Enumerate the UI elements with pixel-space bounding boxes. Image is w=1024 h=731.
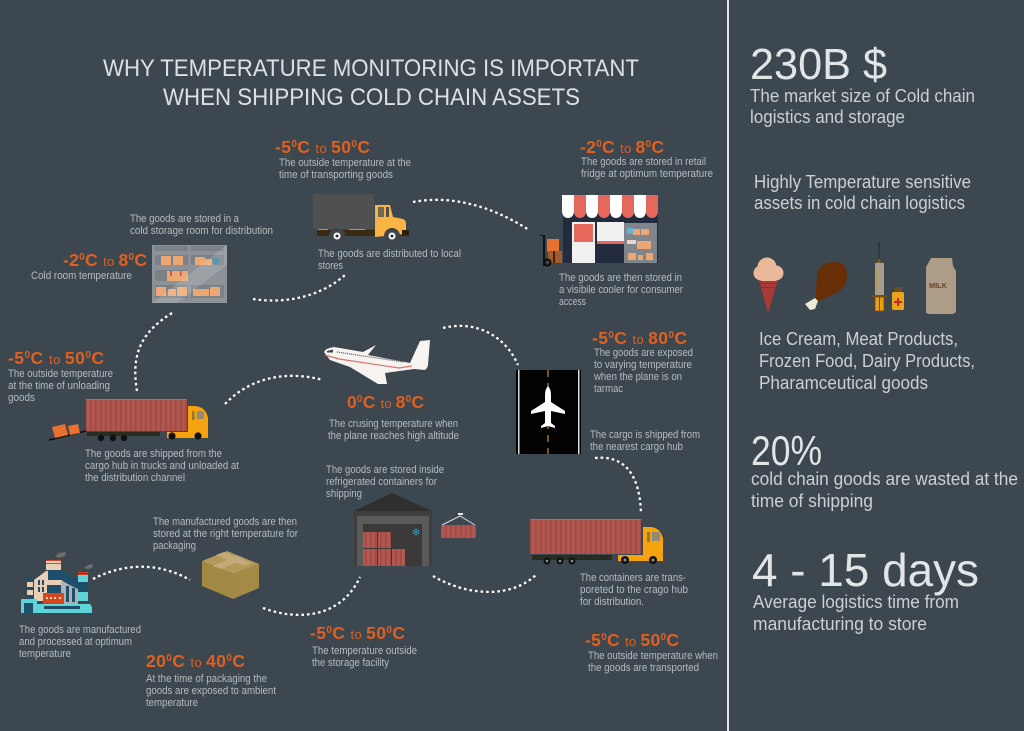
stat: logistics time — [752, 544, 979, 634]
text: cargo hub — [590, 429, 700, 453]
text: transported temperature: The outside temperature when — [588, 650, 718, 662]
temperature: transporting: to 50 — [316, 137, 351, 157]
arrow: unloading truck to cold room — [135, 313, 172, 391]
text: shipped from cargo hub: the distribution channel — [85, 472, 185, 484]
text: local stores — [318, 248, 461, 272]
temperature: in flight: 0 — [357, 394, 363, 405]
text: packaging temperature — [146, 673, 276, 709]
temperature: tarmac: 0 — [668, 330, 674, 341]
text: retail fridge temperature: fridge at optimum temperature — [581, 168, 713, 180]
temperature: packaging: 20 — [146, 651, 166, 671]
temperature: tarmac: C — [614, 328, 632, 348]
icon: refrigerated warehouse: ❄ — [411, 526, 421, 539]
temperature: unloading: 0 — [25, 350, 31, 361]
text: transported temperature: the goods are transported — [588, 662, 699, 674]
arrow: factory to packaging — [93, 567, 190, 580]
text: storage facility temperature: the storage facility — [312, 657, 390, 669]
stat: market size: 230B $ — [750, 40, 887, 89]
temperature: cold room: C — [85, 250, 103, 270]
temperature: transported: 0 — [601, 632, 607, 643]
icon: airplane — [324, 340, 430, 384]
icon: cold storage room — [152, 245, 227, 303]
text: cargo hub: the nearest cargo hub — [590, 441, 683, 453]
text: shipped from cargo hub: cargo hub in trucks and unloaded at — [85, 460, 239, 472]
icon: ice cream — [754, 258, 784, 313]
stat: market size: The market size of Cold chain — [750, 86, 975, 106]
arrow: plane to unloading truck — [225, 376, 323, 404]
temperature: retail fridge: C — [651, 137, 664, 157]
text: retail fridge temperature: The goods are stored in retail — [581, 156, 706, 168]
text: cold storage room: cold storage room for distribution — [130, 225, 273, 237]
text: transporting temperature: time of transporting goods — [279, 169, 393, 181]
temperature: transporting: C — [297, 137, 315, 157]
text: transporting temperature — [279, 157, 411, 181]
temperature: cold room: C — [134, 250, 147, 270]
text: packaging temperature: goods are exposed to ambient — [146, 685, 276, 697]
temperature: storage facility: to 50 — [351, 623, 386, 643]
text: cruising temperature: The crusing temperature when — [329, 418, 458, 430]
arrow: delivery truck to store — [413, 200, 529, 230]
icon: cold storage room: ❄ — [211, 255, 221, 268]
arrow: cold room to delivery truck — [253, 275, 345, 301]
text: retail fridge temperature — [581, 156, 713, 180]
temperature: unloading: 0 — [85, 350, 91, 361]
temperature: cold room: -2 — [63, 250, 79, 270]
icon: milk carton — [926, 258, 956, 314]
icon: container truck right — [530, 519, 663, 564]
text: goods list: Frozen Food, Dairy Products, — [759, 351, 975, 371]
temperature: retail fridge: 0 — [596, 139, 602, 150]
temperature: storage facility: C — [332, 623, 350, 643]
temperature: transported: to 50 — [625, 630, 660, 650]
stat: wastage: cold chain goods are wasted at the — [751, 469, 1018, 489]
icon: delivery truck — [313, 194, 409, 244]
text: visible cooler: a visibile cooler for consumer — [559, 284, 683, 296]
text: refrigerated containers: shipping — [326, 488, 362, 500]
temperature: in flight: 0 — [406, 394, 412, 405]
text: tarmac temperature: to varying temperature — [594, 359, 692, 371]
temperature: cold room: to 8 — [103, 250, 128, 270]
temperature: packaging: C — [232, 651, 245, 671]
text: packaging storage: stored at the right temperature for — [153, 528, 298, 540]
stat: market size — [750, 40, 975, 127]
text: visible cooler: The goods are then stored in — [559, 272, 682, 284]
temperature: transporting: -5 — [275, 137, 291, 157]
temperature: transporting: 0 — [351, 139, 357, 150]
icon: chicken leg — [805, 262, 847, 310]
text: refrigerated containers: The goods are stored inside — [326, 464, 444, 476]
text: cargo hub: The cargo is shipped from — [590, 429, 700, 441]
text: refrigerated containers — [326, 464, 444, 500]
temperature: retail fridge: C — [602, 137, 620, 157]
panel: key statistics — [750, 40, 1018, 634]
text: tarmac temperature: when the plane is on — [593, 371, 682, 383]
panel: shipping journey — [8, 137, 718, 709]
text: goods list: Pharamceutical goods — [759, 373, 928, 393]
temperature: packaging: to 40 — [190, 651, 226, 671]
text: cold storage room: The goods are stored in a — [130, 213, 239, 225]
temperature: tarmac: to 80 — [633, 328, 668, 348]
text: unloading temperature: goods — [8, 392, 35, 404]
text: transported temperature — [588, 650, 718, 674]
temperature: tarmac: C — [674, 328, 687, 348]
icon: refrigerated warehouse — [354, 493, 432, 566]
stat: wastage: 20% — [751, 427, 822, 474]
text: goods list — [759, 329, 975, 393]
text: tarmac temperature — [593, 347, 693, 395]
text: packaging storage — [153, 516, 298, 552]
temperature: in flight: 0 — [347, 392, 357, 412]
temperature: transporting: 0 — [291, 139, 297, 150]
temperature: storage facility: -5 — [310, 623, 326, 643]
text: packaging temperature: temperature — [146, 697, 198, 709]
text: storage facility temperature — [312, 645, 417, 669]
temperature: storage facility: 0 — [326, 625, 332, 636]
text: manufacturing: and processed at optimum — [19, 636, 132, 648]
text: tarmac temperature: tarmac — [594, 383, 624, 395]
text: local stores: The goods are distributed to local — [318, 248, 461, 260]
text: manufacturing: The goods are manufactured — [19, 624, 141, 636]
text: cruising temperature — [328, 418, 459, 442]
text: visible cooler: access — [559, 296, 586, 308]
temperature: packaging: C — [172, 651, 190, 671]
stat: logistics time: 4 - 15 days — [752, 544, 979, 596]
text: unloading temperature — [8, 368, 113, 404]
text: packaging storage: packaging — [153, 540, 196, 552]
temperature: unloading: to 50 — [49, 348, 85, 368]
temperature: unloading: C — [31, 348, 49, 368]
text: shipped from cargo hub: The goods are shipped from the — [85, 448, 222, 460]
temperature: unloading: C — [91, 348, 104, 368]
temperature: packaging: 0 — [226, 653, 232, 664]
text: storage facility temperature: The temperature outside — [312, 645, 417, 657]
temperature: transported: -5 — [585, 630, 601, 650]
text: packaging storage: The manufactured goods are then — [153, 516, 297, 528]
text: manufacturing: temperature — [19, 648, 71, 660]
text: unloading temperature: at the time of unloading — [8, 380, 110, 392]
text: manufacturing — [19, 624, 141, 660]
temperature: transported: C — [666, 630, 679, 650]
text: shipped from cargo hub — [85, 448, 239, 484]
temperature: retail fridge: to 8 — [620, 137, 645, 157]
stat: market size: logistics and storage — [750, 107, 905, 127]
text: visible cooler — [559, 272, 683, 308]
temperature: transported: C — [607, 630, 625, 650]
icon: cardboard box — [202, 551, 259, 599]
temperature: unloading: -5 — [8, 348, 24, 368]
text: tarmac temperature: The goods are exposed — [594, 347, 693, 359]
temperature: packaging: 0 — [166, 653, 172, 664]
text: cruising temperature: the plane reaches high altitude — [328, 430, 459, 442]
text: packaging temperature: At the time of packaging the — [146, 673, 267, 685]
arrow: runway to plane — [443, 326, 518, 365]
temperature: in flight: to 8 — [381, 392, 405, 412]
temperature: retail fridge: -2 — [580, 137, 596, 157]
stat: logistics time: manufacturing to store — [753, 614, 927, 634]
icon: retail store — [540, 195, 658, 266]
text: transporting temperature: The outside temperature at the — [279, 157, 411, 169]
arrow: packaging to storage — [263, 577, 360, 615]
stat: wastage — [751, 427, 1018, 511]
temperature: retail fridge: 0 — [646, 139, 652, 150]
text: local stores: stores — [318, 260, 343, 272]
arrow: storage to truck — [433, 574, 537, 592]
text: goods list: Ice Cream, Meat Products, — [759, 329, 958, 349]
title — [103, 55, 639, 111]
icon: milk carton: MILK — [929, 283, 947, 290]
text: cold room temperature: Cold room temperature — [31, 270, 132, 282]
title: WHY TEMPERATURE MONITORING IS IMPORTANT — [103, 55, 639, 82]
text: sensitive assets heading — [754, 172, 971, 213]
title: WHEN SHIPPING COLD CHAIN ASSETS — [163, 84, 580, 111]
arrow: truck to runway — [595, 458, 641, 514]
temperature: storage facility: 0 — [386, 625, 392, 636]
temperature: transporting: C — [357, 137, 370, 157]
temperature: cold room: 0 — [129, 252, 135, 263]
text: sensitive assets heading: Highly Temperature sensitive — [754, 172, 971, 192]
temperature: in flight: C — [363, 392, 380, 412]
text: sensitive assets heading: assets in cold chain logistics — [754, 193, 965, 213]
text: unloading temperature: The outside temperature — [8, 368, 113, 380]
text: cold storage room — [130, 213, 273, 237]
icon: container on crane hook — [441, 513, 476, 538]
temperature: storage facility: C — [392, 623, 405, 643]
icon: syringe and vial — [872, 242, 904, 311]
temperature: in flight: C — [411, 392, 424, 412]
icon: factory — [21, 552, 93, 613]
text: refrigerated containers: refrigerated containers for — [326, 476, 437, 488]
temperature: tarmac: -5 — [592, 328, 608, 348]
text: transport to cargo hub: The containers are trans- — [580, 572, 686, 584]
text: transport to cargo hub — [580, 572, 688, 608]
temperature: tarmac: 0 — [608, 330, 614, 341]
stat: wastage: time of shipping — [751, 491, 873, 511]
temperature: cold room: 0 — [79, 252, 85, 263]
icon: unloading container truck — [49, 399, 208, 441]
text: transport to cargo hub: for distribution. — [580, 596, 644, 608]
stat: logistics time: Average logistics time from — [753, 592, 959, 612]
temperature: transported: 0 — [661, 632, 667, 643]
icon: runway with plane — [516, 370, 581, 454]
text: transport to cargo hub: poreted to the crago hub — [580, 584, 688, 596]
